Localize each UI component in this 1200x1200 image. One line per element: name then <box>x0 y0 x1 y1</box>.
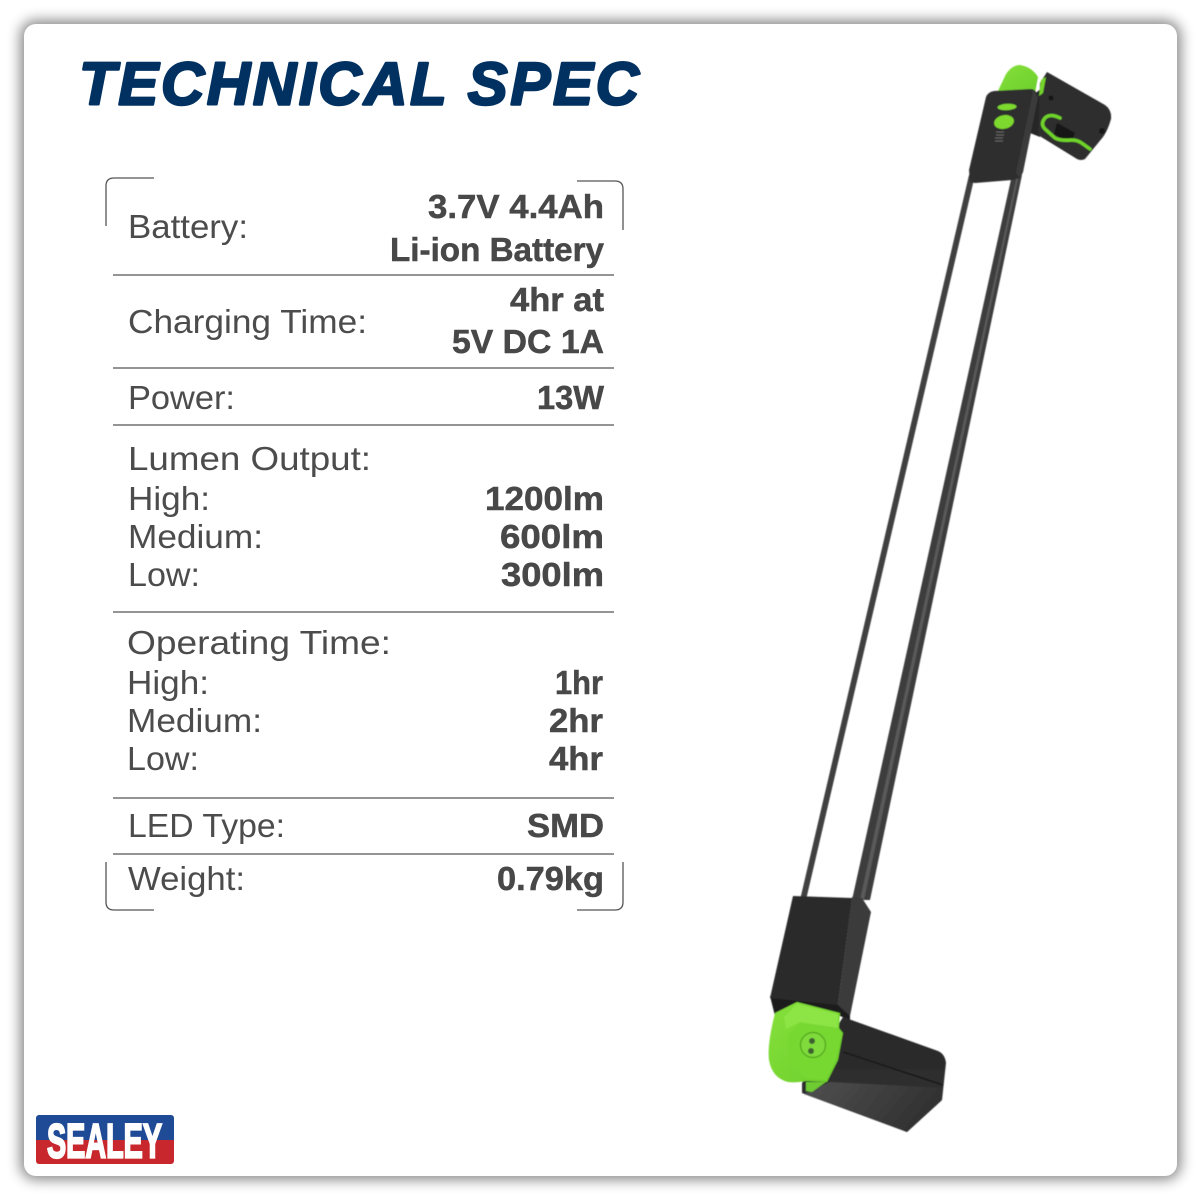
row: operating time: 2hr <box>549 702 603 739</box>
row: lumen output: Medium: <box>128 518 263 555</box>
row: lumen output: Low: <box>128 556 200 593</box>
row: weight <box>128 860 604 897</box>
frame corner: bottom right <box>577 862 623 910</box>
row: lumen output <box>128 440 604 593</box>
bottom folding block <box>802 1017 946 1132</box>
frame corner: top right <box>577 181 623 230</box>
bottom handle <box>770 896 871 1020</box>
row: operating time: 1hr <box>555 664 603 701</box>
frame corner: bottom left <box>106 862 154 910</box>
row: battery: Battery: <box>128 208 248 245</box>
title: TECHNICAL SPEC <box>79 50 641 118</box>
row: operating time: Operating Time: <box>127 624 391 661</box>
row: weight: 0.79kg <box>497 860 604 897</box>
row: battery: Li-ion Battery <box>390 231 605 268</box>
row: power <box>128 379 605 416</box>
mode button <box>997 103 1017 111</box>
row: battery: 3.7V 4.4Ah <box>428 188 604 225</box>
row: operating time <box>127 624 603 777</box>
specification table <box>106 178 623 910</box>
row: charging time: 5V DC 1A <box>452 323 604 360</box>
row: power: Power: <box>128 379 235 416</box>
row: lumen output: Lumen Output: <box>128 440 371 477</box>
logo: Sealey: SEALEY <box>47 1116 162 1168</box>
row: operating time: Low: <box>127 740 199 777</box>
row: lumen output: 1200lm <box>485 480 604 517</box>
row: LED type <box>128 807 604 844</box>
row: battery <box>128 188 605 268</box>
top folding block <box>1030 72 1111 160</box>
hinge pin <box>800 1032 826 1058</box>
row: operating time: 4hr <box>549 740 603 777</box>
top control head <box>969 89 1038 183</box>
frame corner: top left <box>106 178 154 226</box>
row: charging time: 4hr at <box>510 281 604 318</box>
battery indicator <box>995 132 1004 141</box>
power button <box>993 113 1015 131</box>
row: charging time <box>128 281 604 360</box>
row: weight: Weight: <box>128 860 245 897</box>
product image: LED inspection light <box>769 65 1111 1132</box>
row: power: 13W <box>537 379 605 416</box>
row: lumen output: High: <box>128 480 210 517</box>
top green cap <box>997 65 1038 93</box>
row: charging time: Charging Time: <box>128 303 367 340</box>
row: lumen output: 300lm <box>501 556 604 593</box>
row: lumen output: 600lm <box>500 518 604 555</box>
row: operating time: Medium: <box>127 702 262 739</box>
logo: Sealey <box>36 1115 174 1168</box>
row: LED type: LED Type: <box>128 807 285 844</box>
green hinge knuckle <box>769 1002 843 1092</box>
row: LED type: SMD <box>527 807 604 844</box>
light bar rails <box>800 175 1022 900</box>
row: operating time: High: <box>127 664 209 701</box>
